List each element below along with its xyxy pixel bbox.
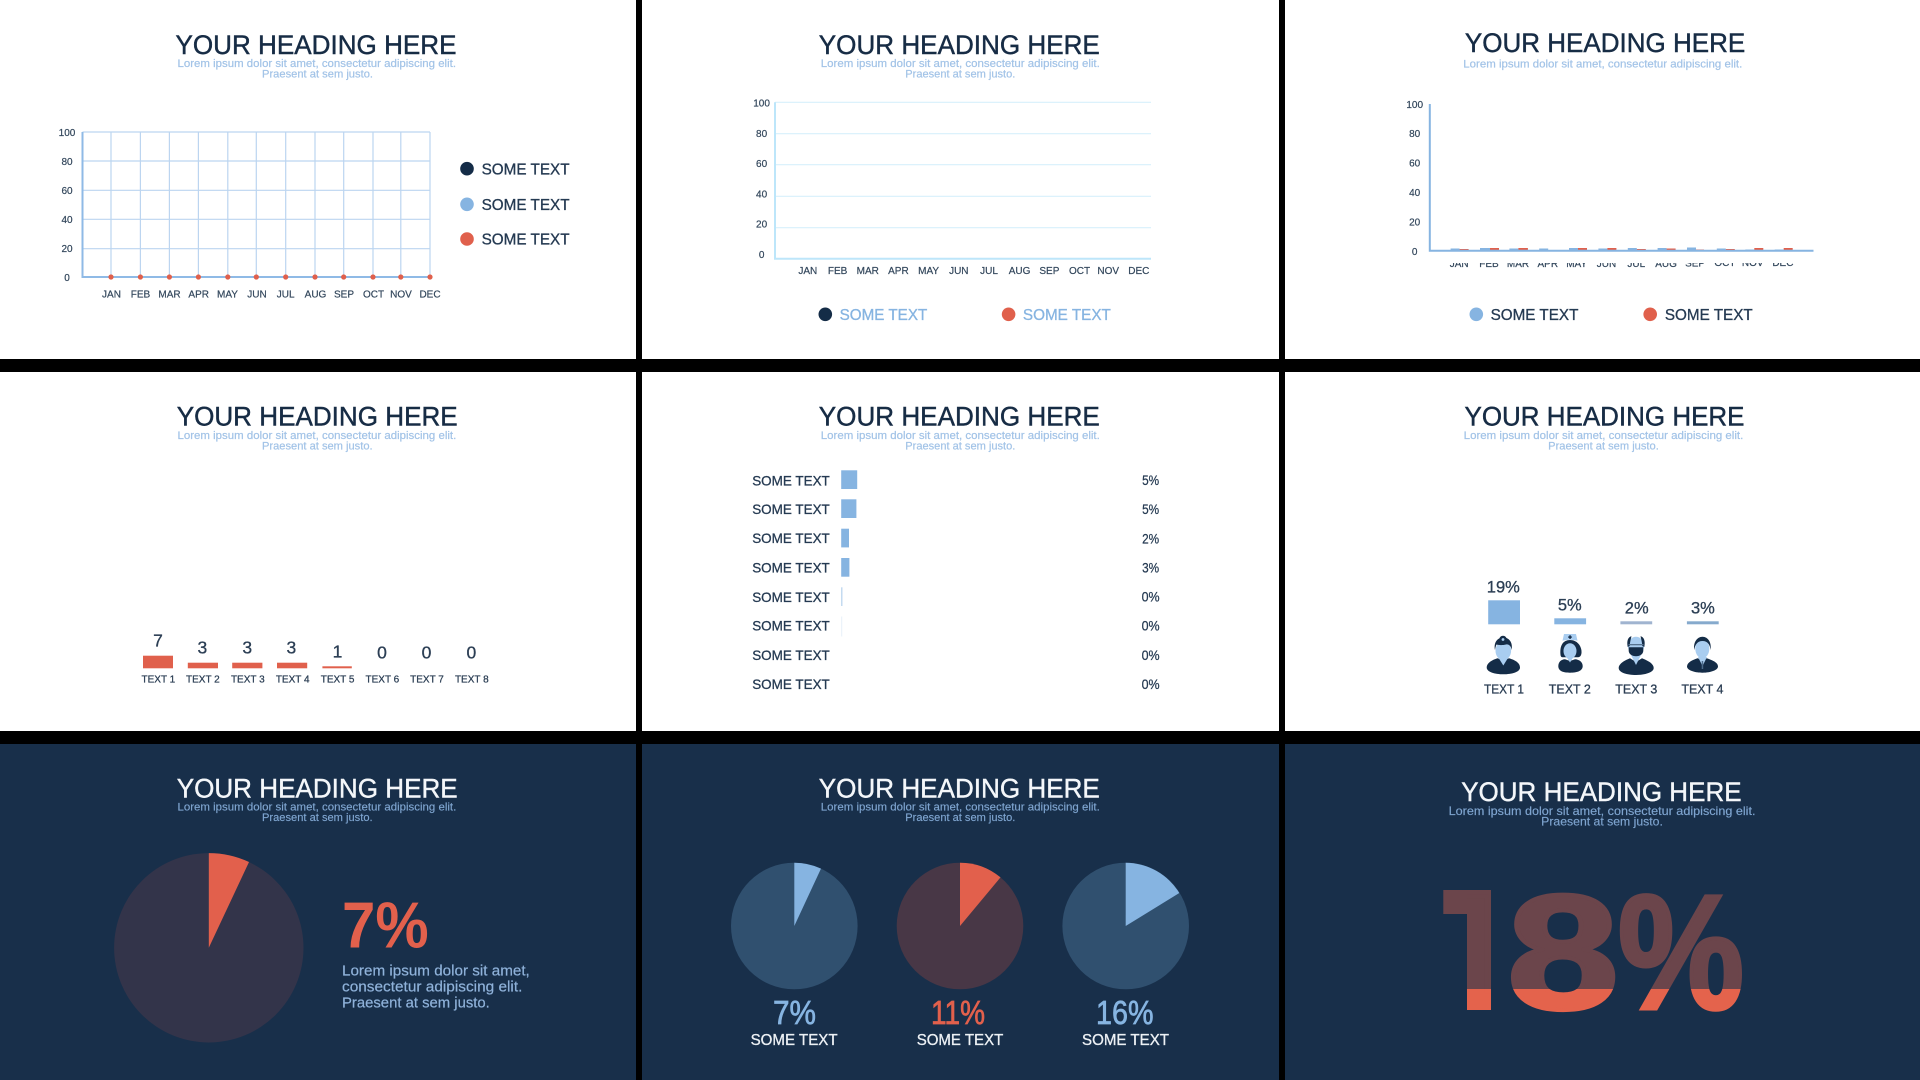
- line chart axes: [753, 98, 1151, 277]
- line chart axes: 20: [756, 220, 768, 231]
- horizontal bar chart: 2%: [1142, 530, 1159, 546]
- bar chart: TEXT 1: [142, 675, 176, 686]
- column chart: 40: [1409, 188, 1421, 199]
- horizontal bar chart: SOME TEXT: [752, 501, 830, 517]
- legend: SOME TEXT: [482, 162, 570, 178]
- line chart axes: JAN: [798, 266, 817, 277]
- subtitle: [821, 58, 1100, 80]
- pie: 11%: [897, 863, 1023, 1049]
- icon: doctor with head mirror: [1487, 636, 1520, 674]
- legend: SOME TEXT: [1023, 307, 1111, 324]
- icon: man with tie: [1687, 637, 1718, 673]
- subtitle: Lorem ipsum dolor sit amet, consectetur adipiscing elit.: [1464, 430, 1743, 442]
- column chart: 60: [1409, 158, 1421, 170]
- bars with values: 5%: [1558, 597, 1582, 615]
- heading: YOUR HEADING HERE: [177, 402, 458, 432]
- legend: SOME TEXT: [840, 307, 928, 324]
- bar chart: 0: [377, 643, 387, 663]
- bars with values: 3%: [1691, 600, 1715, 618]
- panel: small red bars: [0, 372, 636, 731]
- icon labels: TEXT 3: [1615, 681, 1657, 696]
- horizontal bar chart: SOME TEXT: [752, 589, 830, 605]
- horizontal bar chart: 0%: [1142, 676, 1160, 692]
- heading: YOUR HEADING HERE: [819, 30, 1100, 60]
- bar chart: TEXT 8: [455, 675, 489, 686]
- big number 18% filled tone: [1467, 989, 1740, 1012]
- heading: YOUR HEADING HERE: [177, 773, 458, 803]
- pie: 16%: 16%: [1096, 994, 1154, 1031]
- pie: 7%: [731, 863, 858, 1049]
- description: consectetur adipiscing elit.: [342, 978, 522, 996]
- heading: YOUR HEADING HERE: [819, 402, 1100, 432]
- line chart axes: JUL: [980, 266, 998, 277]
- legend: SOME TEXT: [482, 197, 570, 214]
- bar chart: 3: [242, 638, 252, 658]
- grid chart: 80: [61, 157, 73, 168]
- grid chart: 40: [61, 215, 73, 226]
- subtitle: Lorem ipsum dolor sit amet, consectetur adipiscing elit.: [821, 430, 1100, 442]
- bars with values: [1487, 578, 1719, 624]
- subtitle: Praesent at sem justo.: [905, 68, 1015, 80]
- column chart: 0: [1412, 247, 1418, 258]
- icon labels: TEXT 4: [1681, 681, 1723, 696]
- description: Lorem ipsum dolor sit amet,: [342, 962, 530, 980]
- description: Praesent at sem justo.: [342, 994, 490, 1012]
- grid chart: APR: [188, 290, 209, 300]
- panel: column chart: [1285, 0, 1920, 359]
- subtitle: Praesent at sem justo.: [905, 440, 1015, 452]
- heading: YOUR HEADING HERE: [1465, 28, 1745, 58]
- grid chart: AUG: [305, 290, 327, 300]
- bar chart: 3: [198, 638, 207, 658]
- column chart: FEB: [1479, 259, 1499, 270]
- grid chart: JUN: [247, 290, 267, 300]
- horizontal bar chart: 5%: [1142, 472, 1159, 488]
- panel: horizontal bars: [642, 372, 1279, 731]
- big number 18% filled tone: 1: [1426, 860, 1517, 1044]
- grid chart: FEB: [131, 290, 151, 300]
- line chart axes: MAY: [918, 266, 939, 277]
- line chart axes: MAR: [857, 266, 879, 277]
- column chart: OCT: [1714, 258, 1735, 269]
- horizontal bar chart: SOME TEXT: [752, 618, 830, 634]
- big number 18% filled tone: %: [1618, 860, 1744, 1044]
- heading: YOUR HEADING HERE: [176, 30, 456, 60]
- line chart axes: APR: [888, 266, 909, 277]
- line chart axes: NOV: [1097, 266, 1119, 277]
- subtitle: [178, 58, 456, 80]
- subtitle: [1464, 430, 1743, 452]
- grid chart: 100: [59, 128, 76, 139]
- subtitle: Praesent at sem justo.: [262, 68, 373, 80]
- grid chart: 20: [61, 244, 73, 255]
- bar chart: TEXT 5: [321, 675, 355, 686]
- subtitle: Lorem ipsum dolor sit amet, consectetur adipiscing elit.: [821, 58, 1100, 70]
- column chart: SEP: [1685, 258, 1705, 270]
- subtitle: [178, 802, 456, 824]
- grid chart: JAN: [102, 290, 121, 300]
- subtitle: Praesent at sem justo.: [262, 812, 373, 824]
- line chart axes: AUG: [1009, 266, 1031, 277]
- line chart axes: 80: [756, 129, 768, 140]
- line chart axes: 0: [759, 250, 765, 261]
- subtitle: Praesent at sem justo.: [1541, 814, 1663, 828]
- subtitle: [178, 430, 456, 452]
- grid chart: SEP: [334, 290, 354, 300]
- big number 18% upper tone: [1443, 890, 1742, 989]
- panel: line chart with grid: [0, 0, 636, 359]
- column chart: DEC: [1772, 258, 1793, 269]
- pie: 16%: SOME TEXT: [1082, 1032, 1170, 1049]
- column chart: MAY: [1566, 259, 1587, 270]
- grid chart: MAR: [158, 290, 181, 300]
- grid chart: DEC: [419, 290, 441, 300]
- legend: [1470, 307, 1753, 324]
- column chart: MAR: [1507, 259, 1529, 270]
- big number 18% upper tone: %: [1618, 860, 1744, 1044]
- panel: people bars: [1285, 372, 1920, 731]
- subtitle: [821, 802, 1100, 824]
- subtitle: Lorem ipsum dolor sit amet, consectetur adipiscing elit.: [178, 58, 456, 70]
- horizontal bar chart: 0%: [1142, 647, 1160, 663]
- description: [342, 962, 530, 1012]
- bar chart: TEXT 2: [186, 675, 220, 686]
- big number 18% filled tone: 8: [1507, 860, 1619, 1044]
- heading: YOUR HEADING HERE: [1464, 402, 1744, 432]
- subtitle: Praesent at sem justo.: [262, 440, 373, 452]
- bars with values: 2%: [1625, 600, 1649, 618]
- horizontal bar chart: 0%: [1142, 618, 1160, 634]
- subtitle: Lorem ipsum dolor sit amet, consectetur adipiscing elit.: [1449, 804, 1756, 818]
- bar chart: TEXT 7: [410, 675, 444, 686]
- big value: 7%: [342, 888, 429, 961]
- icon: surgeon with mask: [1619, 636, 1654, 675]
- pie chart 7%: [114, 853, 304, 1042]
- subtitle: Lorem ipsum dolor sit amet, consectetur adipiscing elit.: [1463, 58, 1742, 70]
- column chart: 80: [1409, 129, 1421, 140]
- bar chart: [142, 631, 489, 686]
- line chart axes: DEC: [1128, 266, 1149, 277]
- panel: three pie charts: [642, 744, 1279, 1080]
- big number 18% upper tone: 1: [1426, 860, 1517, 1044]
- horizontal bar chart: [752, 470, 1160, 692]
- icon labels: [1484, 681, 1723, 696]
- line chart axes: 100: [753, 98, 770, 110]
- line chart axes: SEP: [1039, 266, 1060, 277]
- column chart: AUG: [1655, 259, 1677, 270]
- horizontal bar chart: SOME TEXT: [752, 530, 830, 546]
- column chart: JUN: [1597, 259, 1616, 270]
- column chart: JUL: [1627, 259, 1646, 270]
- column chart: [1406, 100, 1814, 270]
- bar chart: 0: [467, 643, 477, 663]
- horizontal bar chart: 0%: [1142, 589, 1160, 605]
- legend: SOME TEXT: [482, 232, 570, 249]
- heading: YOUR HEADING HERE: [1461, 777, 1742, 807]
- grid chart: JUL: [277, 290, 295, 300]
- subtitle: Praesent at sem justo.: [905, 812, 1015, 824]
- column chart: NOV: [1742, 258, 1764, 269]
- subtitle: Praesent at sem justo.: [1548, 440, 1659, 452]
- pie: 7%: 7%: [773, 994, 816, 1031]
- legend: SOME TEXT: [1491, 307, 1579, 324]
- horizontal bar chart: SOME TEXT: [752, 676, 830, 692]
- legend: [460, 162, 570, 249]
- icon labels: TEXT 1: [1484, 681, 1524, 696]
- line chart axes: FEB: [828, 266, 848, 277]
- grid chart: 60: [61, 186, 73, 197]
- bar chart: 7: [153, 631, 163, 651]
- grid chart: [59, 128, 441, 300]
- bar chart: TEXT 3: [231, 675, 265, 686]
- big number 18% upper tone: 8: [1507, 860, 1619, 1044]
- column chart: 100: [1406, 100, 1423, 111]
- pie: 7%: SOME TEXT: [751, 1032, 838, 1049]
- column chart: JAN: [1450, 259, 1469, 270]
- horizontal bar chart: SOME TEXT: [752, 647, 830, 663]
- panel: empty horizontal-line chart: [642, 0, 1279, 359]
- bar chart: 0: [422, 643, 432, 663]
- subtitle: [1449, 804, 1756, 828]
- pie: 11%: SOME TEXT: [917, 1032, 1004, 1049]
- bar chart: TEXT 4: [276, 675, 310, 686]
- subtitle: Lorem ipsum dolor sit amet, consectetur adipiscing elit.: [178, 430, 456, 442]
- grid chart: NOV: [390, 290, 412, 300]
- horizontal bar chart: 3%: [1142, 559, 1159, 575]
- horizontal bar chart: SOME TEXT: [752, 559, 830, 575]
- legend: [818, 307, 1111, 324]
- grid chart: 0: [64, 273, 70, 284]
- horizontal bar chart: 5%: [1142, 501, 1159, 517]
- bar chart: 3: [287, 638, 296, 658]
- bar chart: TEXT 6: [366, 675, 400, 686]
- panel: single pie chart: [0, 744, 636, 1080]
- column chart: APR: [1538, 259, 1558, 270]
- subtitle: Lorem ipsum dolor sit amet, consectetur adipiscing elit.: [821, 802, 1100, 814]
- icon labels: TEXT 2: [1549, 681, 1591, 696]
- pie: 16%: [1062, 863, 1189, 1049]
- icon: nurse: [1558, 634, 1583, 673]
- line chart axes: 60: [756, 159, 768, 170]
- pie: 11%: 11%: [931, 994, 985, 1031]
- horizontal bar chart: SOME TEXT: [752, 473, 830, 489]
- line chart axes: OCT: [1069, 266, 1090, 277]
- grid chart: OCT: [363, 290, 384, 300]
- subtitle: Lorem ipsum dolor sit amet, consectetur adipiscing elit.: [178, 802, 456, 814]
- grid chart: MAY: [217, 290, 238, 300]
- line chart axes: 40: [756, 189, 768, 200]
- bar chart: 1: [333, 641, 342, 661]
- panel: big percentage: [1285, 744, 1920, 1080]
- column chart: 20: [1409, 218, 1421, 228]
- heading: YOUR HEADING HERE: [819, 773, 1100, 803]
- subtitle: [821, 430, 1100, 452]
- legend: SOME TEXT: [1665, 307, 1753, 324]
- bars with values: 19%: [1487, 578, 1520, 596]
- line chart axes: JUN: [949, 266, 969, 277]
